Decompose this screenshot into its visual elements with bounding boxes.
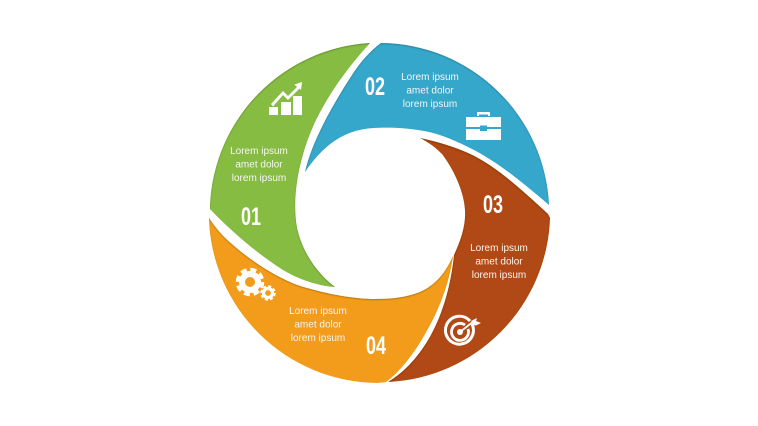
text: 03 description xyxy=(470,243,528,281)
panel: segment 03 brown xyxy=(388,138,550,382)
icon: target xyxy=(445,316,481,344)
text: 04 description: amet dolor xyxy=(294,320,342,330)
text: 02 description: Lorem ipsum xyxy=(401,72,459,83)
panel: segment 02 blue xyxy=(305,43,549,205)
number 04: 04 xyxy=(366,331,386,360)
panel: segment 04 orange xyxy=(209,218,453,383)
text: 04 description xyxy=(289,306,347,344)
text: 01 description xyxy=(230,146,288,184)
text: 03 description: lorem ipsum xyxy=(472,270,526,281)
text: 02 description: lorem ipsum xyxy=(403,99,457,110)
text: 03 description: Lorem ipsum xyxy=(470,243,528,254)
text: 04 description: lorem ipsum xyxy=(291,333,345,344)
icon: gears xyxy=(238,270,274,300)
icon: growth chart xyxy=(269,82,302,115)
text: 04 description: Lorem ipsum xyxy=(289,306,347,317)
panel: segment 01 green xyxy=(210,43,370,287)
number 02: 02 xyxy=(365,72,385,101)
text: 01 description: lorem ipsum xyxy=(232,173,286,184)
text: 02 description xyxy=(401,72,459,110)
number 03: 03 xyxy=(483,190,503,219)
icon: briefcase xyxy=(466,112,501,140)
text: 03 description: amet dolor xyxy=(475,256,523,268)
text: 01 description: Lorem ipsum xyxy=(230,146,288,157)
cycle diagram xyxy=(209,43,550,383)
text: 02 description: amet dolor xyxy=(406,86,454,96)
text: 01 description: amet dolor xyxy=(235,160,283,170)
number 01: 01 xyxy=(241,202,261,231)
